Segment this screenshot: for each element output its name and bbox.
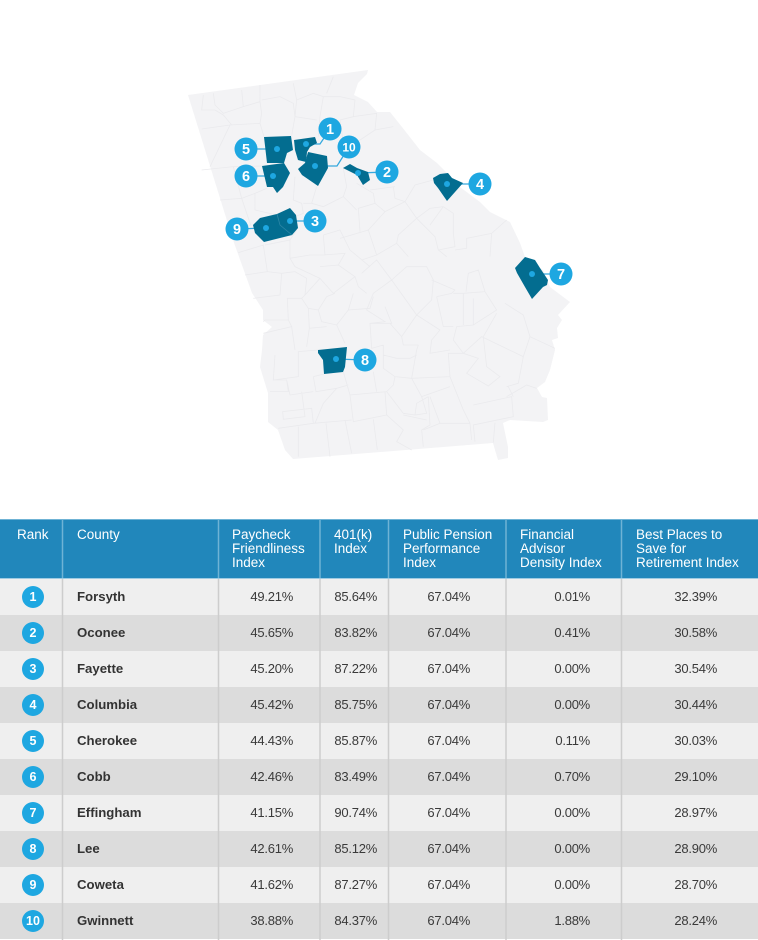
callout badges: 1 (326, 122, 334, 138)
row 4 (0, 687, 758, 723)
row 1: 85.64% (334, 589, 377, 604)
row 3: 0.00% (554, 661, 590, 676)
row 5 (0, 723, 758, 759)
row 2: 2 (30, 626, 36, 640)
row 10: 67.04% (427, 913, 470, 928)
header: Best Places to Save for Retirement Index (636, 527, 739, 570)
row 4: 45.42% (250, 697, 293, 712)
highlighted county: Effingham (515, 257, 548, 299)
header: Paycheck Friendliness Index: Friendliness (232, 541, 305, 556)
header: Financial Advisor Density Index: Financial (520, 527, 574, 542)
callout badges: 10 (342, 140, 356, 154)
row 7 (0, 795, 758, 831)
highlighted county: Oconee (343, 164, 370, 185)
row 8: 85.12% (334, 841, 377, 856)
callout badges: 3 (311, 214, 319, 230)
row 10: 10 (26, 914, 40, 928)
header: 401(k) Index (334, 527, 372, 556)
row 3: 3 (30, 662, 36, 676)
row 10: Gwinnett (77, 913, 133, 928)
row 6: 6 (30, 770, 36, 784)
row 5: 85.87% (334, 733, 377, 748)
header: Paycheck Friendliness Index: Index (232, 555, 265, 570)
header: Public Pension Performance Index (403, 527, 492, 570)
row 7: 90.74% (334, 805, 377, 820)
callout badges: 7 (557, 267, 565, 283)
county lines east central (340, 180, 507, 260)
table header band (0, 519, 758, 579)
callout badges: 6 (242, 169, 250, 185)
row 8: 42.61% (250, 841, 293, 856)
header: Public Pension Performance Index: Index (403, 555, 436, 570)
row 5: 0.11% (555, 733, 590, 748)
row 5: 5 (30, 734, 36, 748)
header: Financial Advisor Density Index (520, 527, 602, 570)
row 1: 0.01% (554, 589, 590, 604)
row 7: 0.00% (554, 805, 590, 820)
row 10: 84.37% (334, 913, 377, 928)
callout badges: 5 (242, 142, 250, 158)
row 2 (0, 615, 758, 651)
row 1: 32.39% (674, 589, 717, 604)
row 8: 0.00% (554, 841, 590, 856)
header: Paycheck Friendliness Index (232, 527, 305, 570)
row 8: Lee (77, 841, 100, 856)
state outline (188, 70, 570, 460)
highlighted counties: Coweta and Fayette (253, 208, 298, 242)
row 9: Coweta (77, 877, 124, 892)
row 3: 30.54% (674, 661, 717, 676)
header: Public Pension Performance Index: Performance (403, 541, 480, 556)
county lines north (202, 77, 393, 230)
row 4: 0.00% (554, 697, 590, 712)
row 4: 4 (30, 698, 36, 712)
row 9: 87.27% (334, 877, 377, 892)
county dots (263, 141, 535, 362)
header: Financial Advisor Density Index: Density Index (520, 555, 602, 570)
header: Public Pension Performance Index: Public Pension (403, 527, 492, 542)
header: Rank: Rank (17, 527, 49, 542)
row 4: Columbia (77, 697, 137, 712)
highlighted county: Forsyth (294, 137, 317, 162)
row 9 (0, 867, 758, 903)
header: Best Places to Save for Retirement Index: Save for (636, 541, 686, 556)
row 6: 0.70% (554, 769, 590, 784)
row 8: 8 (30, 842, 36, 856)
row 6 (0, 759, 758, 795)
row 4: 30.44% (674, 697, 717, 712)
header: Paycheck Friendliness Index: Paycheck (232, 527, 291, 542)
row 6: Cobb (77, 769, 111, 784)
row 4: 67.04% (427, 697, 470, 712)
header: County: County (77, 527, 120, 542)
callout badges: 2 (383, 165, 391, 181)
row 6: 83.49% (334, 769, 377, 784)
row 10: 38.88% (250, 913, 293, 928)
row 3: Fayette (77, 661, 123, 676)
row 9: 0.00% (554, 877, 590, 892)
county lines south (270, 260, 555, 457)
header: Best Places to Save for Retirement Index: Best Places to (636, 527, 722, 542)
row 9: 67.04% (427, 877, 470, 892)
header: 401(k) Index: Index (334, 541, 367, 556)
highlighted county: Lee (318, 347, 347, 374)
row 2: Oconee (77, 625, 125, 640)
callout badges (226, 118, 572, 372)
header: 401(k) Index: 401(k) (334, 527, 372, 542)
row 1 (0, 579, 758, 615)
row 2: 83.82% (334, 625, 377, 640)
row 8: 67.04% (427, 841, 470, 856)
map of Georgia (188, 70, 572, 460)
county lines west central (238, 230, 373, 350)
row 8: 28.90% (674, 841, 717, 856)
row 2: 67.04% (427, 625, 470, 640)
header: Best Places to Save for Retirement Index: Retirement Index (636, 555, 739, 570)
row 2: 0.41% (554, 625, 590, 640)
callout badges: 8 (361, 353, 369, 369)
row 6: 42.46% (250, 769, 293, 784)
row 7: 7 (30, 806, 36, 820)
row 10 (0, 903, 758, 939)
row 1: 1 (30, 590, 36, 604)
row 10: 28.24% (674, 913, 717, 928)
row 7: 41.15% (250, 805, 293, 820)
row 5: Cherokee (77, 733, 137, 748)
row 2: 30.58% (674, 625, 717, 640)
row 1: 67.04% (427, 589, 470, 604)
row 3: 67.04% (427, 661, 470, 676)
callout badges: 4 (476, 177, 484, 193)
callout badges: 9 (233, 222, 241, 238)
highlighted county: Cobb (262, 163, 290, 193)
row 1: 49.21% (250, 589, 293, 604)
row 3 (0, 651, 758, 687)
highlighted county: Gwinnett (298, 152, 328, 186)
row 9: 28.70% (674, 877, 717, 892)
row 6: 67.04% (427, 769, 470, 784)
row 4: 85.75% (334, 697, 377, 712)
highlighted county: Columbia (433, 173, 463, 201)
row 3: 87.22% (334, 661, 377, 676)
row 8 (0, 831, 758, 867)
row 6: 29.10% (674, 769, 717, 784)
leader lines (237, 129, 561, 360)
row 5: 44.43% (250, 733, 293, 748)
header: Financial Advisor Density Index: Advisor (520, 541, 565, 556)
row 7: 28.97% (674, 805, 717, 820)
row 9: 41.62% (250, 877, 293, 892)
row 1: Forsyth (77, 589, 125, 604)
row 7: 67.04% (427, 805, 470, 820)
row 9: 9 (30, 878, 36, 892)
row 2: 45.65% (250, 625, 293, 640)
row 7: Effingham (77, 805, 141, 820)
highlighted county: Cherokee (264, 136, 293, 163)
row 3: 45.20% (250, 661, 293, 676)
row 5: 30.03% (674, 733, 717, 748)
row 5: 67.04% (427, 733, 470, 748)
row 10: 1.88% (554, 913, 590, 928)
